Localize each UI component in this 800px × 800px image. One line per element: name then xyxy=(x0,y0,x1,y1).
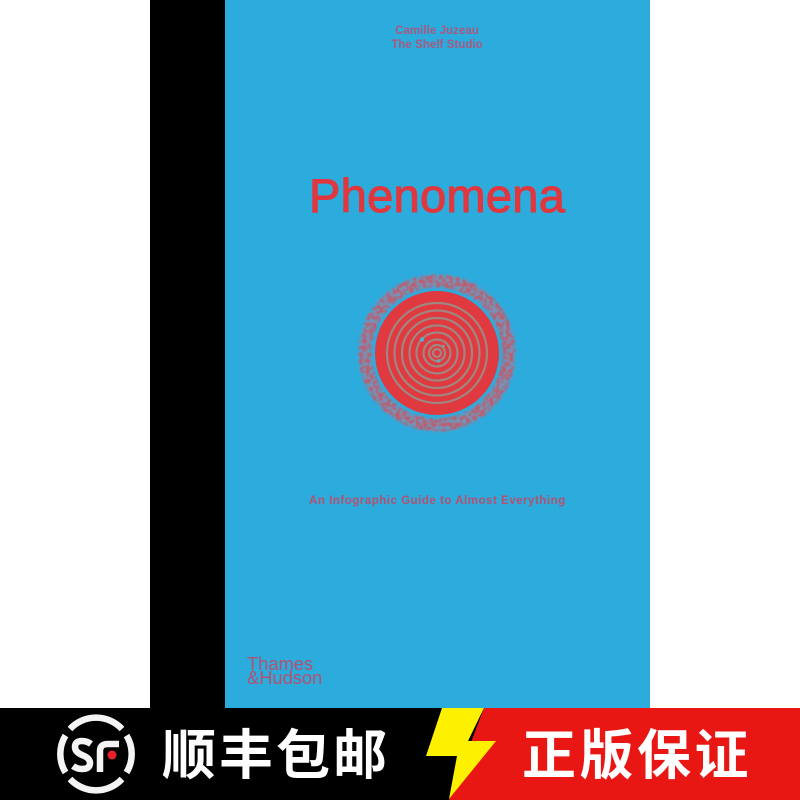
author names xyxy=(391,24,483,51)
book cover panel xyxy=(225,0,650,708)
author names: Camille Juzeau xyxy=(395,24,479,36)
dotted outer halo xyxy=(365,281,509,425)
publisher logo xyxy=(247,652,322,688)
book spine xyxy=(150,0,225,708)
icon: concentric orbit circle xyxy=(357,273,517,433)
icon: SF logo xyxy=(57,714,135,794)
text: free shipping: 顺丰包邮 xyxy=(162,726,390,786)
publisher logo: &Hudson xyxy=(247,667,322,688)
banner: black background xyxy=(0,708,800,800)
author names: The Shelf Studio xyxy=(391,39,483,51)
subtitle: An Infographic Guide to Almost Everything xyxy=(309,494,566,506)
text: genuine guarantee: 正版保证 xyxy=(522,726,752,786)
banner: red section xyxy=(426,708,800,800)
red disc xyxy=(375,291,499,415)
publisher logo: Thames xyxy=(247,652,313,674)
icon: lightning bolt xyxy=(426,708,496,799)
orbit rings xyxy=(387,303,487,403)
title: Phenomena xyxy=(309,169,565,222)
planets xyxy=(420,337,424,342)
